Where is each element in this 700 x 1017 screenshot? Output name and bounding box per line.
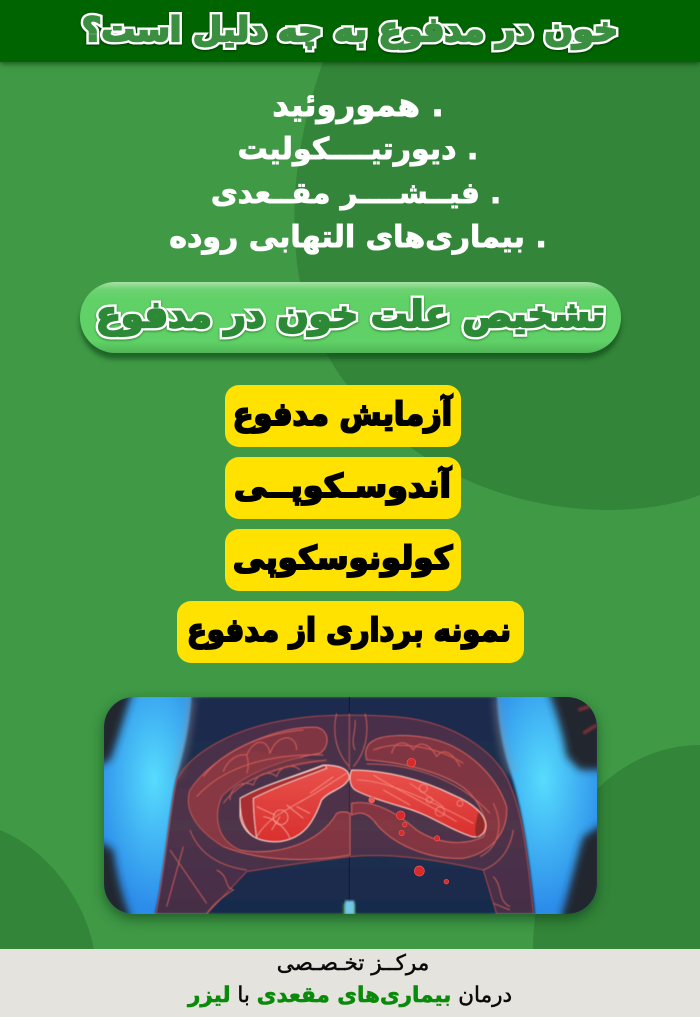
cause 4: . بیماری‌های التهابی روده [169, 220, 547, 255]
footer line 2: درمان بیماری‌های مقعدی با لیزر [188, 983, 512, 1008]
header bar [0, 0, 700, 62]
title: خون در مدفوع به چه دلیل است؟ [82, 10, 618, 49]
causes list [169, 86, 547, 255]
red polyps [369, 758, 449, 884]
button: stool sampling: نمونه برداری از مدفوع [187, 611, 511, 649]
button: endoscopy: آندوسـکوپــی [233, 467, 451, 505]
footer line 1: مرکــز تخـصـصی [277, 951, 429, 976]
button: endoscopy [225, 457, 461, 519]
right organ [350, 770, 486, 837]
left organ [240, 765, 349, 842]
diagnosis banner [80, 282, 621, 353]
cause 2: . دیورتیــــکولیت [238, 132, 478, 167]
button: stool sampling [177, 601, 524, 663]
cause 1: . هموروئید [272, 86, 444, 124]
banner heading: تشخیص علت خون در مدفوع [96, 293, 605, 336]
button: colonoscopy [225, 529, 461, 591]
button: stool test: آزمایش مدفوع [232, 395, 452, 433]
button: stool test [225, 385, 461, 447]
button: colonoscopy: کولونوسکوپی [233, 539, 453, 577]
cause 3: . فیــشــــر مقــعدی [211, 176, 501, 210]
title: خون در مدفوع به چه دلیل است؟ [82, 10, 618, 49]
illustration: pelvis anatomy [104, 697, 597, 914]
body [155, 697, 535, 914]
footer [0, 949, 700, 1017]
banner heading: تشخیص علت خون در مدفوع [96, 293, 605, 336]
translucent pelvis [156, 713, 533, 914]
